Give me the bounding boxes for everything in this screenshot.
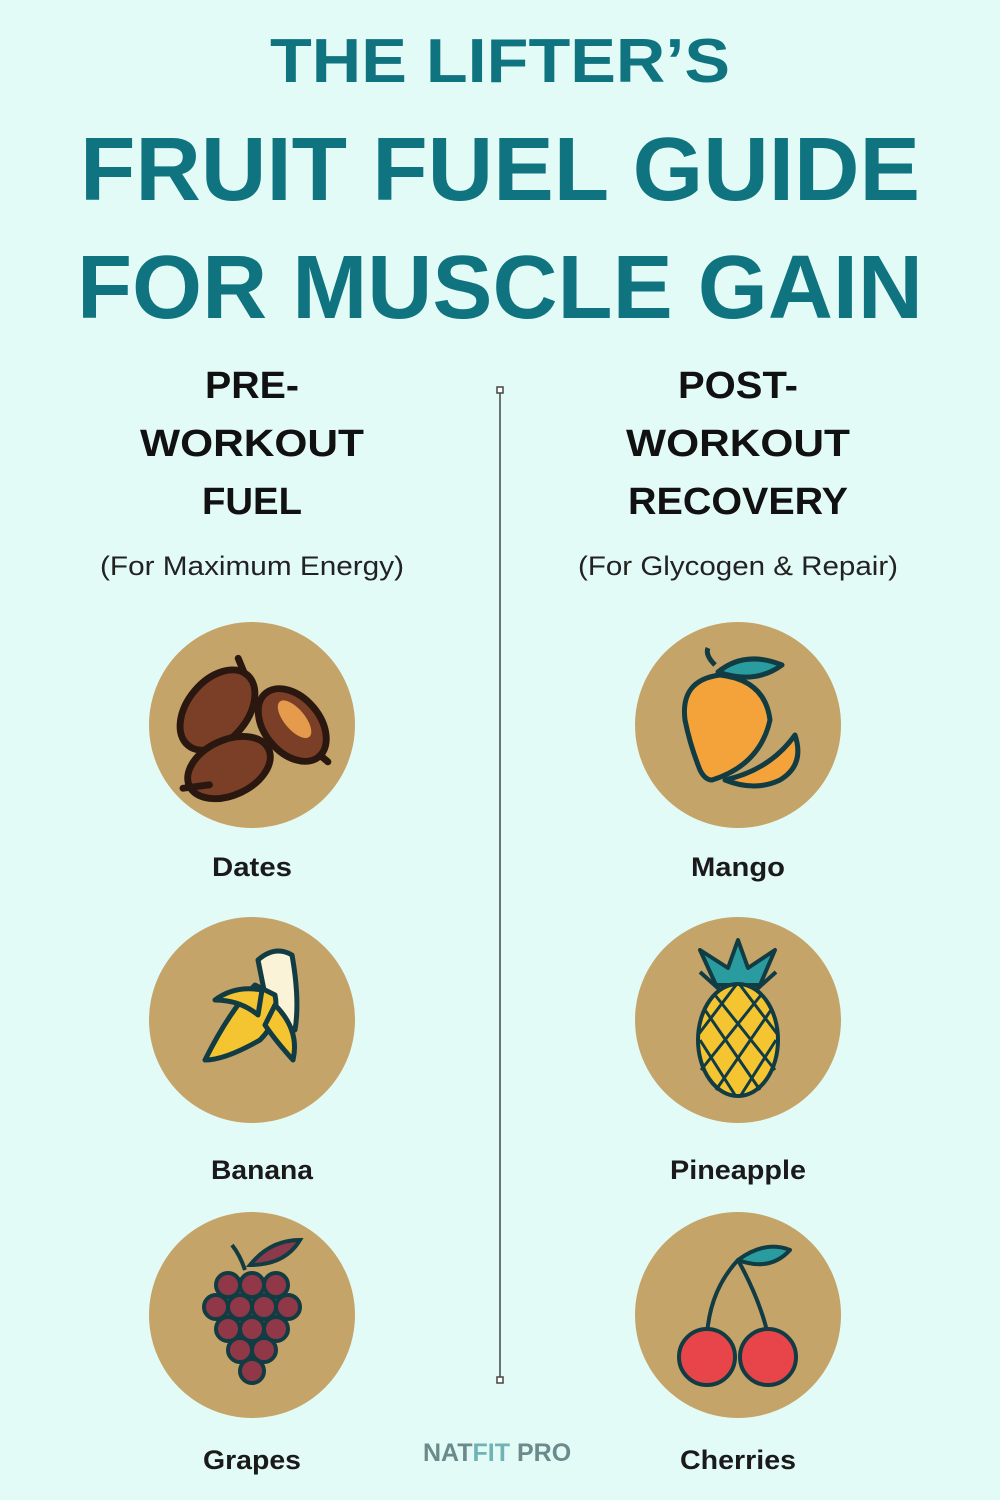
label: cherries: Cherries xyxy=(680,1445,796,1475)
logo: NATFIT PRO xyxy=(423,1439,571,1467)
heading: post-workout xyxy=(626,365,850,523)
label: pineapple: Pineapple xyxy=(670,1155,806,1185)
icon: dates xyxy=(149,622,355,828)
heading: post-workout: POST- xyxy=(678,365,798,407)
icon: pineapple xyxy=(635,917,841,1123)
title: THE LIFTER’S xyxy=(270,27,730,96)
icon: mango xyxy=(635,622,841,828)
heading: pre-workout: FUEL xyxy=(202,481,302,523)
subtitle: post-workout: (For Glycogen & Repair) xyxy=(578,551,898,581)
label: grapes: Grapes xyxy=(203,1445,301,1475)
label: banana: Banana xyxy=(211,1155,314,1185)
title: FRUIT FUEL GUIDE xyxy=(80,120,920,220)
heading: pre-workout: PRE- xyxy=(205,365,299,407)
label: dates: Dates xyxy=(212,852,292,882)
icon: grapes xyxy=(149,1212,355,1418)
icon: cherries xyxy=(635,1212,841,1418)
label: mango: Mango xyxy=(691,852,785,882)
heading: post-workout: RECOVERY xyxy=(628,481,848,523)
heading: pre-workout xyxy=(140,365,364,523)
heading: pre-workout: WORKOUT xyxy=(140,423,364,465)
heading: post-workout: WORKOUT xyxy=(626,423,850,465)
icon: banana xyxy=(149,917,355,1123)
title xyxy=(77,27,923,338)
subtitle: pre-workout: (For Maximum Energy) xyxy=(100,551,404,581)
title: FOR MUSCLE GAIN xyxy=(77,238,923,338)
